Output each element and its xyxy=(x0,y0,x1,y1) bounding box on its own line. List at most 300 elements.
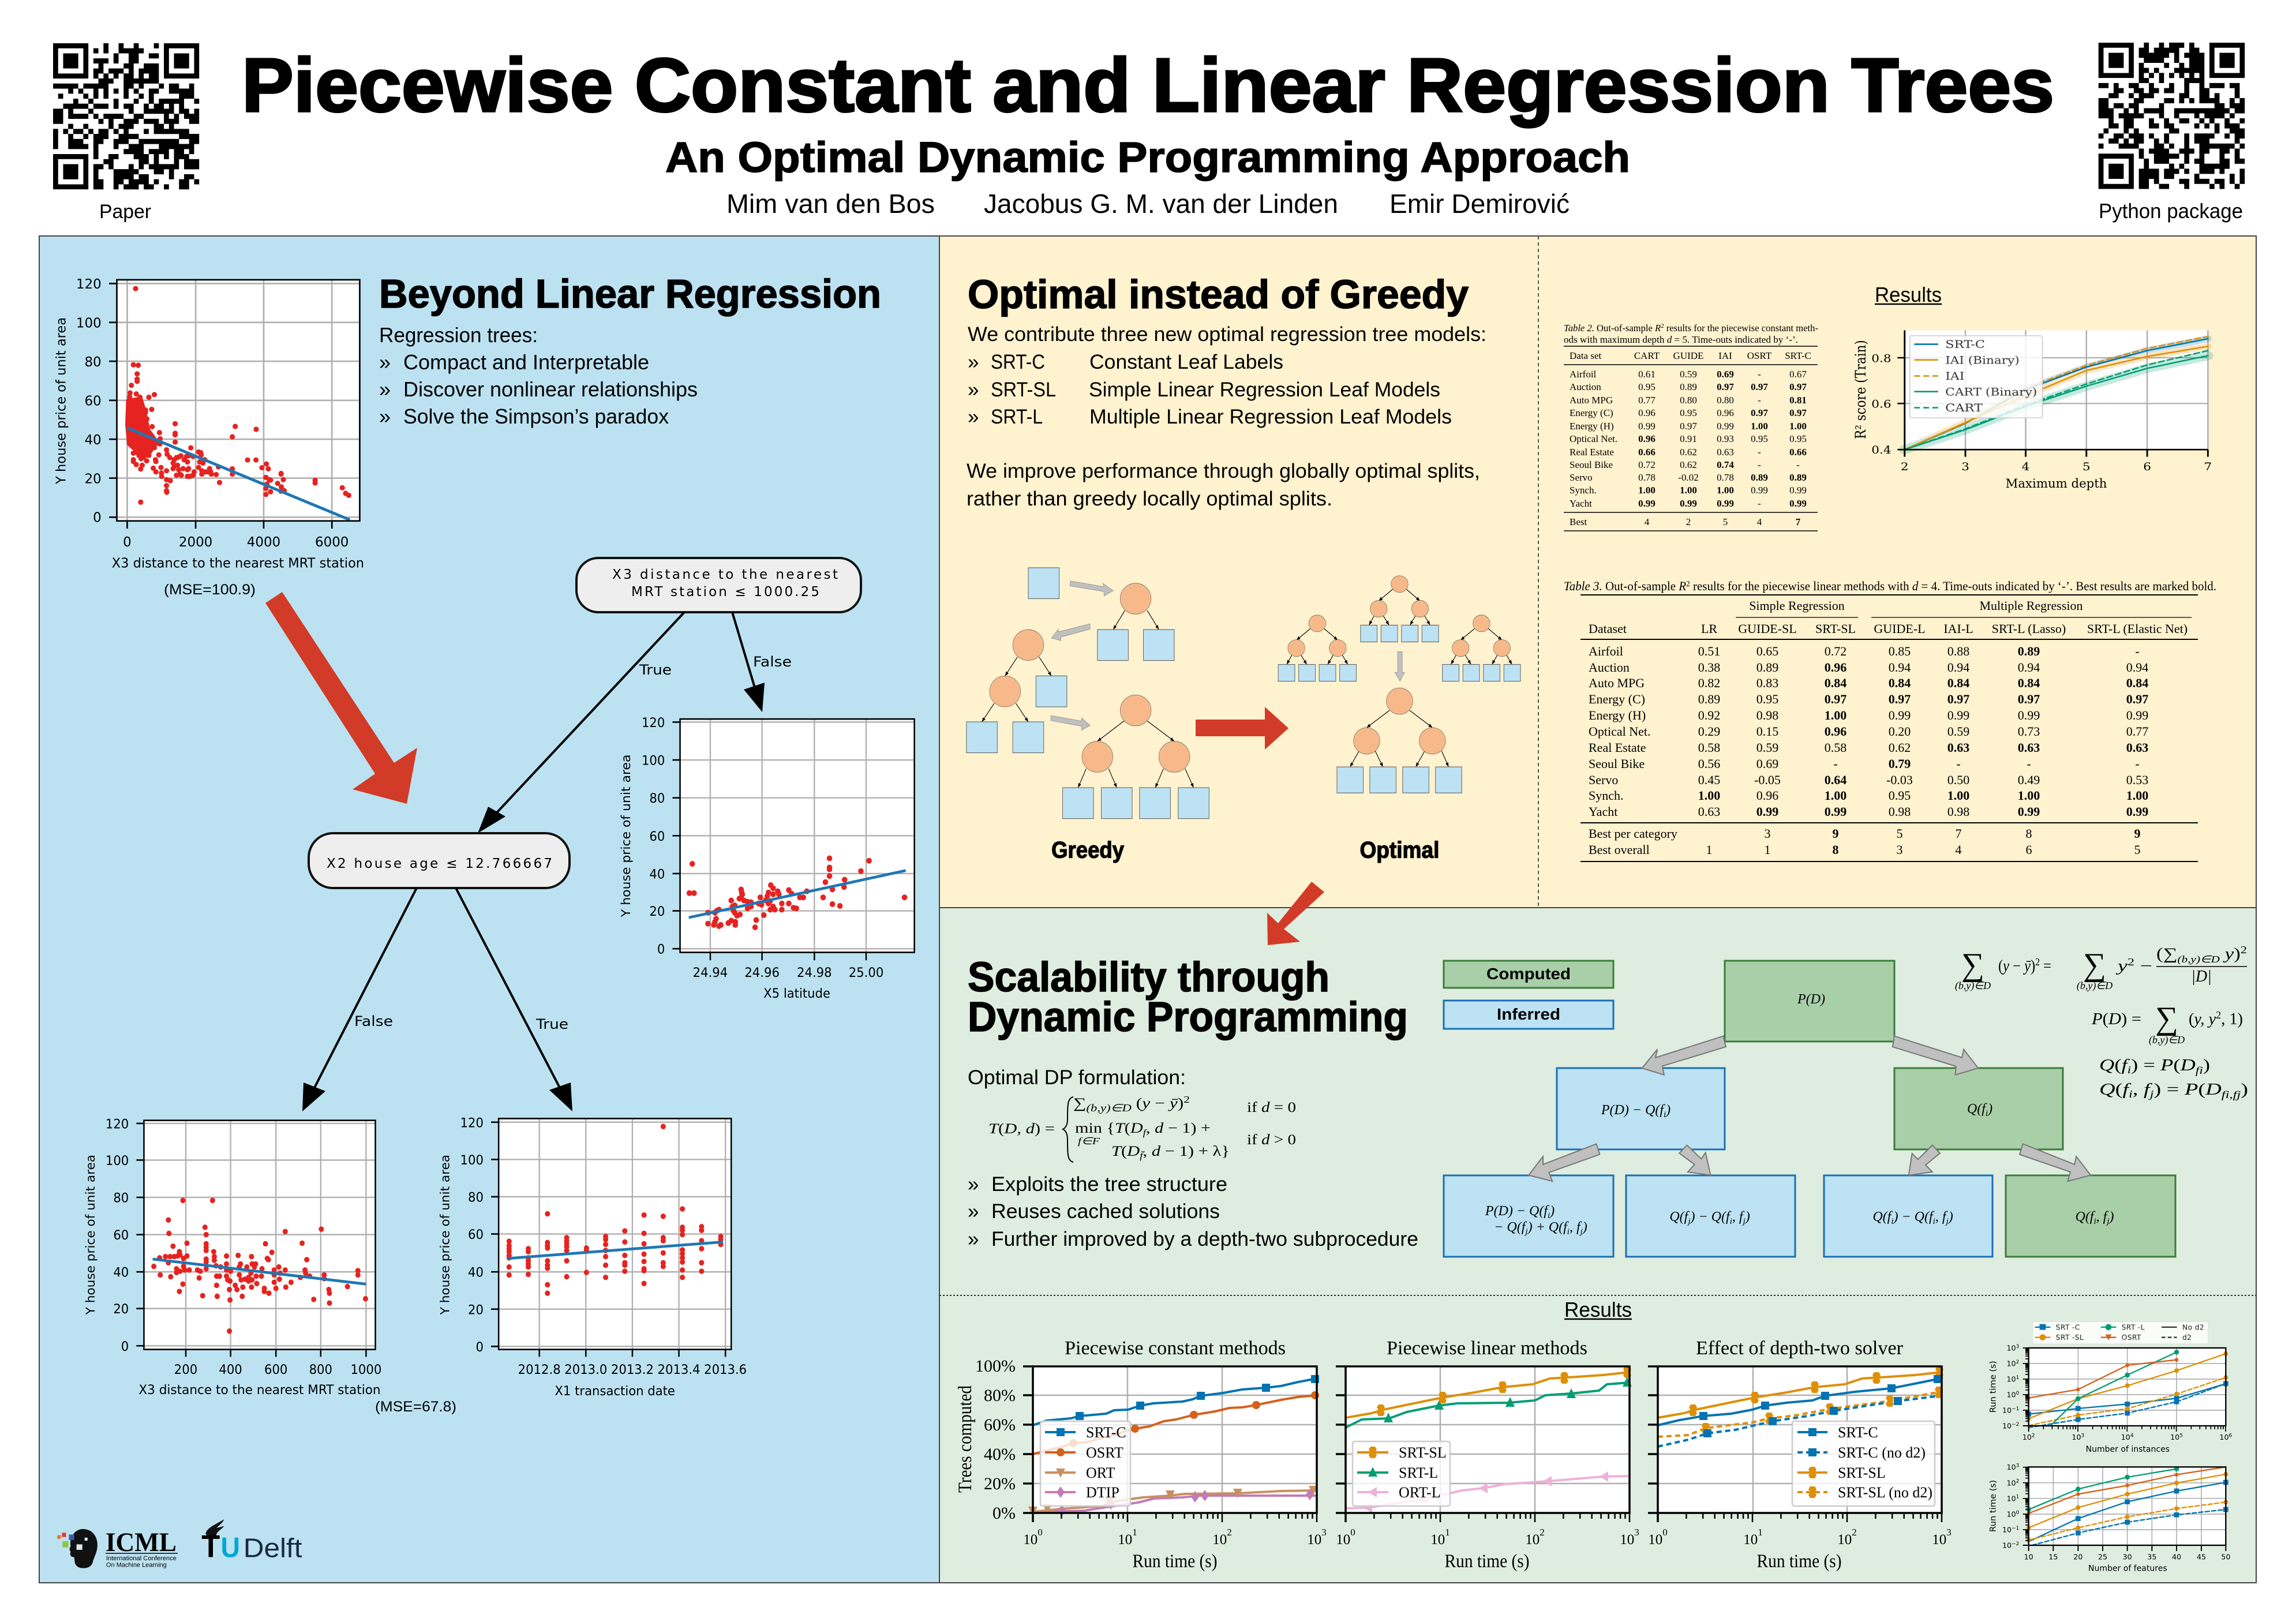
chart: piecewise linear methods: 10 xyxy=(1430,1532,1445,1548)
chart: run time vs instances: 3 xyxy=(2081,1433,2084,1439)
equations: sum of squares identities: = xyxy=(2040,957,2051,975)
table 2: constant methods: Synch. xyxy=(1570,485,1597,496)
chart: run time vs instances: 3 xyxy=(2016,1344,2019,1350)
subtitle: An Optimal Dynamic Programming Approach xyxy=(665,133,1630,181)
equation: T recurrence: min { T(D xyxy=(1075,1121,1141,1136)
logo: TU Delft xyxy=(201,1519,302,1564)
chart: piecewise constant methods: 2 xyxy=(1227,1527,1232,1538)
table 3: linear methods: GUIDE-SL xyxy=(1738,621,1797,636)
heading: scalability through dynamic programming xyxy=(968,954,1408,1040)
chart: piecewise constant methods: 10 xyxy=(1023,1532,1037,1548)
label: MSE 100.9: (MSE=100.9) xyxy=(164,582,256,598)
chart: scatter X3 subset: Y house price of unit area xyxy=(84,1155,98,1315)
diagram: dynamic programming tree: i xyxy=(2093,1217,2096,1226)
table 3: linear methods: 0.72 xyxy=(1825,644,1846,658)
equation: T recurrence xyxy=(988,1094,1296,1162)
text block: regression trees list: » xyxy=(379,350,391,374)
table 3: linear methods: Dataset xyxy=(1589,621,1627,636)
equations: sum of squares identities: ) = xyxy=(2131,1057,2160,1074)
chart: run time vs instances: 10 xyxy=(2170,1433,2179,1441)
table 3: linear methods: 0.95 xyxy=(1889,788,1911,803)
equations: sum of squares identities: ∑ xyxy=(2155,1001,2178,1036)
table 3: linear methods: -0.03 xyxy=(1886,773,1913,787)
table 3: linear methods: 0.49 xyxy=(2018,773,2040,787)
table 3: linear methods: 0.59 xyxy=(1756,740,1778,755)
table 2: constant methods: Best xyxy=(1570,516,1587,527)
equations: sum of squares identities: 2 xyxy=(2128,956,2134,968)
table 3: linear methods: IAI-L xyxy=(1943,621,1973,636)
table 3: linear methods: Auction xyxy=(1589,660,1630,675)
logo: ICML: ICML xyxy=(106,1527,177,1557)
table 3: linear methods: Servo xyxy=(1589,773,1618,787)
text block: DP bullets xyxy=(968,1173,1418,1250)
table 3: linear methods: 0.63 xyxy=(2126,740,2148,755)
table 3: linear methods: 0.83 xyxy=(1756,676,1778,690)
equations: sum of squares identities: (b,y)∈D xyxy=(2178,954,2220,965)
chart: scatter X3 full data: 0 xyxy=(93,511,102,526)
chart: scatter X3 full data: 0 xyxy=(123,535,132,550)
label: paper: Paper xyxy=(99,201,151,223)
table 2: constant methods: Auto MPG xyxy=(1570,395,1613,406)
diagram: dynamic programming tree: j xyxy=(1742,1217,1746,1226)
table 2: constant methods: 0.62 xyxy=(1680,459,1697,470)
diagram: dynamic programming tree: j xyxy=(1687,1217,1690,1226)
equations: sum of squares identities: (∑ xyxy=(2156,945,2173,963)
chart: run time vs instances: 10 xyxy=(2007,1359,2016,1368)
table 3: linear methods: Auto MPG xyxy=(1589,676,1645,690)
chart: run time vs features: 10 xyxy=(2002,1541,2012,1550)
equations: sum of squares identities: ∑ xyxy=(1961,947,1984,983)
arrow: X2 node true branch: True xyxy=(535,1016,568,1032)
legend: run time charts: No d2 xyxy=(2182,1323,2204,1331)
table 3: linear methods: 0.99 xyxy=(2018,708,2040,722)
table 2: constant methods: 0.78 xyxy=(1717,472,1734,483)
chart: R2 score vs depth: CART xyxy=(1945,401,1983,414)
chart: scatter X1 transaction date: 120 xyxy=(460,1116,484,1130)
legend: run time charts: SRT -L xyxy=(2122,1323,2145,1331)
chart: effect of depth-two solver: 10 xyxy=(1932,1532,1946,1548)
diagram: dynamic programming tree: ) xyxy=(1549,1204,1555,1219)
diagram: dynamic programming tree: − Q(f xyxy=(1494,1220,1525,1235)
table 3: linear methods: 0.96 xyxy=(1756,788,1778,803)
table 3: linear methods: Airfoil xyxy=(1589,644,1623,658)
equation: T recurrence: ∑ xyxy=(1073,1096,1084,1111)
diagram: dynamic programming tree: j xyxy=(1579,1227,1583,1237)
chart: scatter X3 full data: Y house price of unit area xyxy=(54,317,69,485)
equation: T recurrence: if d > 0 xyxy=(1247,1132,1296,1148)
chart: run time vs features: 45 xyxy=(2197,1553,2206,1561)
arrow: X3 node true branch: True xyxy=(639,662,672,678)
logo: ICML xyxy=(57,1527,178,1569)
panel: scalability through dynamic programming xyxy=(939,908,2256,1583)
text block: regression trees list: Discover nonlinear relationships xyxy=(403,377,698,401)
chart: run time vs instances: 10 xyxy=(2022,1433,2032,1441)
chart: piecewise constant methods: Piecewise constant methods xyxy=(1065,1338,1286,1359)
title: Piecewise Constant and Linear Regression Trees xyxy=(242,43,2054,128)
table 3: linear methods: 0.45 xyxy=(1698,773,1720,787)
text block: model list: rather than greedy locally optimal splits. xyxy=(967,488,1332,510)
table 3: linear methods: d = 4. Time-outs indicated by ‘-’. Best results are marked bold. xyxy=(1912,579,2231,593)
equation: T recurrence: (b,y)∈D xyxy=(1086,1102,1132,1114)
chart: R2 score vs depth: Maximum depth xyxy=(2006,477,2107,491)
table 2: constant methods: 1.00 xyxy=(1680,485,1697,496)
chart: run time vs instances: 10 xyxy=(2072,1433,2081,1441)
chart: scatter X5 latitude: 120 xyxy=(642,716,665,731)
table 3: linear methods: Best per category xyxy=(1589,826,1677,841)
table 2: constant methods: 0.63 xyxy=(1717,447,1734,458)
chart: run time vs features: 20 xyxy=(2073,1553,2082,1561)
diagram: dynamic programming tree: ) xyxy=(1665,1103,1671,1118)
chart: piecewise constant methods: 3 xyxy=(1321,1527,1327,1538)
chart: scatter X3 full data: 120 xyxy=(76,277,102,292)
chart: R2 score vs depth: 3 xyxy=(1961,460,1969,473)
diagram: greedy tree construction xyxy=(967,568,1209,863)
logo: ICML: International Conference xyxy=(106,1556,177,1562)
table 2: constant methods: 2 xyxy=(1661,323,1664,329)
table 3: linear methods: Synch. xyxy=(1589,788,1624,803)
chart: run time vs features: 35 xyxy=(2147,1553,2156,1561)
table 3: linear methods: 0.69 xyxy=(1756,756,1778,771)
diagram: dynamic programming tree: , f xyxy=(1570,1220,1582,1235)
diagram: dynamic programming tree: ) xyxy=(1987,1102,1992,1117)
chart: run time vs instances: 5 xyxy=(2179,1433,2183,1439)
diagram: dynamic programming tree: , f xyxy=(2096,1209,2109,1224)
table 3: linear methods: 2 xyxy=(1686,580,1690,589)
chart: piecewise linear methods: 2 xyxy=(1540,1527,1545,1538)
table 2: constant methods: Optical Net. xyxy=(1570,433,1617,444)
table 3: linear methods: Energy (H) xyxy=(1589,708,1646,722)
equations: sum of squares identities: P(D xyxy=(2160,1057,2192,1074)
table 2: constant methods: CART xyxy=(1634,350,1660,361)
table 3: linear methods: SRT-L (Lasso) xyxy=(1992,621,2066,636)
equations: sum of squares identities: (b,y)∈D xyxy=(1955,980,1991,992)
table 2: constant methods: 1.00 xyxy=(1638,485,1655,496)
chart: run time vs instances: Number of instances xyxy=(2086,1445,2170,1454)
table 3: linear methods: 9 xyxy=(1833,826,1838,841)
equations: sum of squares identities: j xyxy=(2148,1088,2154,1100)
chart: run time vs instances: −1 xyxy=(2012,1406,2019,1412)
table 3: linear methods: 0.97 xyxy=(1825,692,1846,706)
diagram: dynamic programming tree xyxy=(1444,961,2175,1257)
text block: DP bullets: Exploits the tree structure xyxy=(991,1173,1227,1196)
legend: computed and inferred xyxy=(1444,961,1613,1029)
table 3: linear methods: 0.62 xyxy=(1889,740,1911,755)
diagram: dynamic programming tree: i xyxy=(1567,1227,1570,1237)
table 2: constant methods xyxy=(1564,323,1818,531)
table 2: constant methods: 0.97 xyxy=(1751,407,1768,418)
chart: scatter X3 subset: 600 xyxy=(264,1363,287,1377)
table 3: linear methods xyxy=(1564,579,2216,861)
table 3: linear methods: 0.95 xyxy=(1756,692,1778,706)
equations: sum of squares identities: Q (f xyxy=(2099,1081,2127,1099)
table 2: constant methods: 0.99 xyxy=(1717,498,1734,509)
chart: scatter X3 full data: 60 xyxy=(84,394,102,409)
chart: run time vs features: 10 xyxy=(2024,1553,2033,1561)
diagram: dynamic programming tree: , f xyxy=(1935,1209,1948,1224)
equations: sum of squares identities: |D| xyxy=(2191,968,2212,986)
text block: model list: » xyxy=(968,406,979,428)
diagram: dynamic programming tree: Q(f xyxy=(1967,1102,1986,1117)
diagram: dynamic programming tree: ) xyxy=(2108,1209,2114,1224)
authors: Jacobus G. M. van der Linden xyxy=(984,189,1338,219)
tree node: X2 split: X2 house age ≤ 12.766667 xyxy=(327,856,552,871)
table 3: linear methods: 0.64 xyxy=(1825,773,1846,787)
table 2: constant methods: 0.91 xyxy=(1680,433,1697,444)
chart: scatter X5 latitude: 24.98 xyxy=(797,965,832,980)
table 2: constant methods: Data set xyxy=(1570,350,1602,361)
equations: sum of squares identities: fi,fj xyxy=(2222,1089,2241,1100)
text block: DP bullets: Further improved by a depth-two subprocedure xyxy=(991,1228,1418,1250)
table 3: linear methods: 0.92 xyxy=(1698,708,1720,722)
chart: scatter X3 subset: 80 xyxy=(113,1191,129,1206)
table 3: linear methods: 5 xyxy=(2134,842,2141,857)
table 2: constant methods: 0.96 xyxy=(1717,407,1734,418)
table 2: constant methods: -0.02 xyxy=(1678,472,1699,483)
table 3: linear methods: 0.82 xyxy=(1698,676,1720,690)
table 3: linear methods: 0.56 xyxy=(1698,756,1720,771)
arrow: X3 node false branch xyxy=(732,612,792,712)
arrow: optimal to scalability xyxy=(1267,882,1324,945)
logo: ICML: On Machine Learning xyxy=(106,1562,167,1569)
arrow: X3 node true branch xyxy=(478,612,684,833)
chart: piecewise constant methods: 100% xyxy=(975,1357,1016,1376)
arrow: X2 node true branch xyxy=(456,888,572,1111)
chart: scatter X1 transaction date: 60 xyxy=(468,1228,484,1242)
chart: scatter X3 full data: 6000 xyxy=(315,535,349,550)
table 2: constant methods: - xyxy=(1758,369,1761,380)
chart: R2 score vs depth: SRT-C xyxy=(1945,338,1985,351)
table 2: constant methods: Auction xyxy=(1570,381,1601,392)
chart: scatter X3 full data: X3 distance to the nearest MRT station xyxy=(112,556,364,571)
table 2: constant methods: 0.89 xyxy=(1680,381,1697,392)
table 3: linear methods: Seoul Bike xyxy=(1589,756,1645,771)
chart: scatter X1 transaction date: 80 xyxy=(468,1190,484,1205)
table 2: constant methods: 0.74 xyxy=(1717,459,1734,470)
diagram: dynamic programming tree: i xyxy=(1730,1217,1732,1226)
table 3: linear methods: 0.79 xyxy=(1889,756,1911,771)
chart: scatter X5 latitude: 20 xyxy=(649,905,665,919)
arrow: big red down-right xyxy=(265,592,417,804)
chart: scatter X1 transaction date xyxy=(439,1116,747,1399)
table 2: constant methods: OSRT xyxy=(1747,350,1772,361)
chart: run time vs features: −2 xyxy=(2012,1541,2019,1547)
table 3: linear methods: 0.98 xyxy=(1947,804,1969,819)
logo: TU Delft: U xyxy=(220,1533,240,1564)
text block: model list: We contribute three new optimal regression tree models: xyxy=(968,323,1486,346)
table 3: linear methods: 0.50 xyxy=(1947,773,1969,787)
panel: optimal instead of greedy xyxy=(939,236,2256,908)
legend: run time charts: d2 xyxy=(2182,1333,2192,1342)
equations: sum of squares identities: f xyxy=(2144,1081,2152,1099)
chart: piecewise linear methods: ORT-L xyxy=(1399,1484,1441,1501)
table 2: constant methods: 0.77 xyxy=(1638,395,1655,406)
text block: DP bullets: Reuses cached solutions xyxy=(991,1200,1220,1223)
table 3: linear methods: 0.29 xyxy=(1698,724,1720,739)
table 2: constant methods: Servo xyxy=(1570,472,1593,483)
table 3: linear methods: Real Estate xyxy=(1589,740,1646,755)
table 3: linear methods: 0.99 xyxy=(2018,804,2040,819)
chart: piecewise constant methods: DTIP xyxy=(1086,1484,1119,1501)
table 2: constant methods: - xyxy=(1758,459,1761,470)
table 3: linear methods: 0.85 xyxy=(1889,644,1911,658)
text block: model list: Simple Linear Regression Leaf Models xyxy=(1089,379,1440,401)
table 2: constant methods: 0.89 xyxy=(1789,472,1807,483)
text block: regression trees list: » xyxy=(379,404,391,428)
chart: piecewise constant methods: SRT-C xyxy=(1086,1424,1126,1441)
table 2: constant methods: Airfoil xyxy=(1570,369,1597,380)
table 3: linear methods: 0.96 xyxy=(1825,660,1846,675)
table 2: constant methods: Real Estate xyxy=(1570,447,1614,458)
text block: model list: SRT-C xyxy=(991,351,1045,373)
tree node: X3 split xyxy=(576,558,861,612)
table 2: constant methods: 0.61 xyxy=(1638,369,1655,380)
chart: run time vs features: Run time (s) xyxy=(1988,1480,1998,1532)
diagram: dynamic programming tree: Q(f xyxy=(1872,1209,1891,1224)
chart: scatter X5 latitude: 24.94 xyxy=(693,965,728,980)
table 2: constant methods: Table 2. Out-of-sample R xyxy=(1564,323,1661,334)
chart: effect of depth-two solver: 10 xyxy=(1648,1532,1662,1548)
tree node: X3 split: MRT station ≤ 1000.25 xyxy=(631,585,819,600)
chart: scatter X1 transaction date: 20 xyxy=(468,1303,484,1317)
chart: piecewise constant methods: 60% xyxy=(984,1415,1016,1434)
chart: run time vs instances: 10 xyxy=(2007,1375,2016,1384)
chart: piecewise linear methods: 3 xyxy=(1634,1527,1639,1538)
equations: sum of squares identities: (b,y)∈D xyxy=(2149,1034,2185,1046)
table 3: linear methods: SRT-L (Elastic Net) xyxy=(2087,621,2188,636)
table 3: linear methods: 1 xyxy=(1706,842,1713,857)
table 3: linear methods: 0.84 xyxy=(2126,676,2148,690)
table 3: linear methods: 0.77 xyxy=(2126,724,2148,739)
chart: scatter X3 full data: 4000 xyxy=(247,535,280,550)
equation: T recurrence: T(D, d ) = xyxy=(988,1121,1055,1137)
chart: scatter X3 subset: 0 xyxy=(121,1339,129,1354)
table 2: constant methods: 0.59 xyxy=(1680,369,1697,380)
table 3: linear methods: 0.99 xyxy=(1889,708,1911,722)
text block: regression trees list: Regression trees: xyxy=(379,323,538,347)
heading: results scalability: Results xyxy=(1564,1298,1632,1321)
diagram: dynamic programming tree: ) xyxy=(1947,1209,1953,1224)
table 2: constant methods: 0.95 xyxy=(1789,433,1807,444)
table 3: linear methods: - xyxy=(1956,756,1961,771)
chart: run time vs features: 10 xyxy=(2007,1478,2016,1487)
equations: sum of squares identities: i xyxy=(2128,1064,2131,1076)
diagram: dynamic programming tree: ) − Q(f xyxy=(1689,1209,1732,1224)
chart: scatter X5 latitude: 0 xyxy=(657,942,665,957)
table 2: constant methods: 0.66 xyxy=(1789,447,1807,458)
heading: scalability through dynamic programming: Scalability through xyxy=(968,954,1329,1001)
chart: piecewise linear methods: Run time (s) xyxy=(1445,1551,1529,1572)
table 3: linear methods: -0.05 xyxy=(1754,773,1781,787)
equations: sum of squares identities: y) xyxy=(2225,945,2239,963)
chart: scatter X1 transaction date: 40 xyxy=(468,1265,484,1280)
table 2: constant methods: 0.99 xyxy=(1789,485,1807,496)
chart: run time vs instances: 1 xyxy=(2016,1375,2019,1381)
chart: run time vs instances: 10 xyxy=(2002,1406,2012,1415)
text block: regression trees list: » xyxy=(379,377,391,401)
table 3: linear methods: 0.38 xyxy=(1698,660,1720,675)
chart: run time vs instances: 2 xyxy=(2016,1359,2019,1365)
text block: model list: Constant Leaf Labels xyxy=(1089,351,1283,373)
table 3: linear methods: results for the piecewise linear methods with xyxy=(1690,579,1912,593)
table 3: linear methods: 0.94 xyxy=(2126,660,2148,675)
table 2: constant methods: 0.99 xyxy=(1751,485,1768,496)
table 3: linear methods: 0.99 xyxy=(2126,804,2148,819)
equation: T recurrence: y − ȳ) xyxy=(1142,1096,1182,1111)
diagram: dynamic programming tree: j xyxy=(2106,1217,2110,1226)
table 3: linear methods: 0.73 xyxy=(2018,724,2040,739)
table 3: linear methods: 0.63 xyxy=(1947,740,1969,755)
table 2: constant methods: GUIDE xyxy=(1673,350,1703,361)
chart: scatter X1 transaction date: 2012.8 xyxy=(518,1363,561,1377)
chart: piecewise linear methods: SRT-SL xyxy=(1399,1444,1447,1461)
table 2: constant methods: Yacht xyxy=(1570,498,1592,509)
table 3: linear methods: 3 xyxy=(1896,842,1903,857)
chart: run time vs features: 15 xyxy=(2048,1553,2058,1561)
table 2: constant methods: 0.72 xyxy=(1638,459,1655,470)
table 2: constant methods: - xyxy=(1796,459,1800,470)
equation: T recurrence: d − 1) + λ} xyxy=(1152,1144,1217,1159)
table 2: constant methods: 5 xyxy=(1723,516,1728,527)
chart: piecewise constant methods: 0% xyxy=(992,1504,1016,1523)
text block: model list: » xyxy=(968,351,979,373)
diagram: dynamic programming tree: j xyxy=(1945,1217,1949,1226)
chart: scatter X3 full data: 2000 xyxy=(179,535,212,550)
table 3: linear methods: 0.15 xyxy=(1756,724,1778,739)
table 2: constant methods: Energy (C) xyxy=(1570,407,1613,418)
text block: DP bullets: » xyxy=(968,1228,979,1250)
chart: R2 score vs depth: 0.8 xyxy=(1871,352,1892,365)
chart: scatter X3 subset: 20 xyxy=(113,1302,129,1317)
table 2: constant methods: 7 xyxy=(1796,516,1801,527)
diagram: dynamic programming tree: i xyxy=(1986,1109,1988,1118)
chart: scatter X3 subset: 60 xyxy=(113,1228,129,1243)
chart: scatter X5 latitude xyxy=(619,716,915,1001)
table 3: linear methods: 0.89 xyxy=(1756,660,1778,675)
table 2: constant methods: ods with maximum depth d = 5. Time-outs indicated by ‘-’. xyxy=(1564,334,1798,345)
table 3: linear methods: 0.97 xyxy=(1947,692,1969,706)
chart: run time vs instances: 6 xyxy=(2229,1433,2233,1439)
chart: piecewise constant methods: 10 xyxy=(1307,1532,1321,1548)
chart: run time vs features: 30 xyxy=(2123,1553,2132,1561)
equation: T recurrence: ( xyxy=(1132,1096,1142,1111)
text block: model list: » xyxy=(968,379,979,401)
table 2: constant methods: SRT-C xyxy=(1785,350,1811,361)
chart: effect of depth-two solver: SRT-SL (no d2) xyxy=(1838,1484,1932,1501)
table 2: constant methods: 1.00 xyxy=(1751,421,1768,432)
chart: piecewise linear methods: SRT-L xyxy=(1399,1464,1438,1481)
diagram: dynamic programming tree: P(D) − Q(f xyxy=(1601,1103,1664,1118)
table 3: linear methods: Simple Regression xyxy=(1749,598,1845,613)
chart: piecewise linear methods: 10 xyxy=(1620,1532,1634,1548)
table 3: linear methods: 1.00 xyxy=(2126,788,2148,803)
table 3: linear methods: 0.99 xyxy=(2126,708,2148,722)
chart: effect of depth-two solver: 10 xyxy=(1837,1532,1852,1548)
chart: R2 score vs depth: CART (Binary) xyxy=(1945,385,2037,398)
chart: run time vs features: 2 xyxy=(2016,1479,2019,1485)
chart: R2 score vs depth: 0.6 xyxy=(1871,398,1892,410)
heading: scalability through dynamic programming: Dynamic Programming xyxy=(968,994,1408,1040)
chart: R2 score vs depth: 6 xyxy=(2143,460,2151,473)
table 3: linear methods: 0.84 xyxy=(1889,676,1911,690)
legend: computed and inferred: Inferred xyxy=(1497,1005,1560,1023)
equations: sum of squares identities: P(D xyxy=(2185,1081,2217,1099)
chart: scatter X5 latitude: Y house price of unit area xyxy=(619,755,634,917)
chart: scatter X5 latitude: 100 xyxy=(642,754,665,769)
table 2: constant methods: 2 xyxy=(1686,516,1691,527)
equation: T recurrence: f̄ xyxy=(1140,1151,1145,1161)
table 3: linear methods: 0.84 xyxy=(1825,676,1846,690)
diagram: dynamic programming tree: P(D) xyxy=(1797,992,1825,1007)
